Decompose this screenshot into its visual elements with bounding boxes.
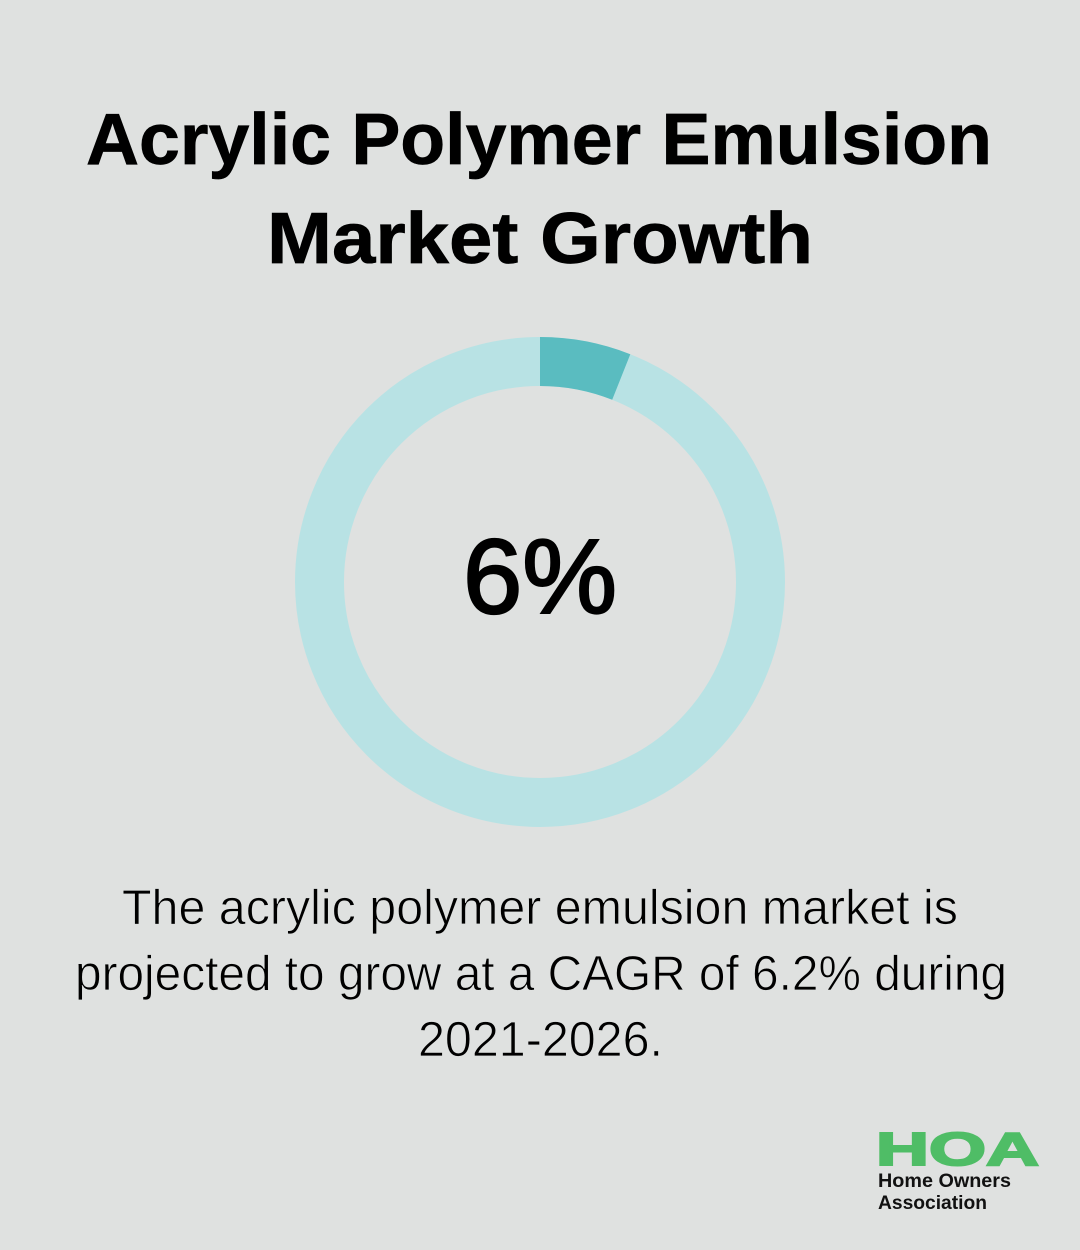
title: Acrylic Polymer Emulsion <box>86 100 992 180</box>
description text: The acrylic polymer emulsion market is <box>122 881 958 935</box>
description text: projected to grow at a CAGR of 6.2% during <box>75 947 1007 1001</box>
donut chart <box>320 337 760 802</box>
logo: Home Owners Association <box>876 1123 1039 1214</box>
logo wordmark: Home Owners <box>878 1171 1011 1192</box>
title: Market Growth <box>267 199 813 279</box>
donut track <box>320 362 760 802</box>
logo wordmark <box>878 1171 1011 1214</box>
donut highlighted segment <box>540 337 630 400</box>
logo wordmark: Association <box>878 1193 987 1214</box>
description text: 2021-2026. <box>418 1013 663 1067</box>
title <box>86 100 992 279</box>
logo mark HOA: HOA <box>876 1123 1039 1175</box>
description text <box>75 881 1007 1067</box>
donut value: 6% <box>463 518 617 636</box>
